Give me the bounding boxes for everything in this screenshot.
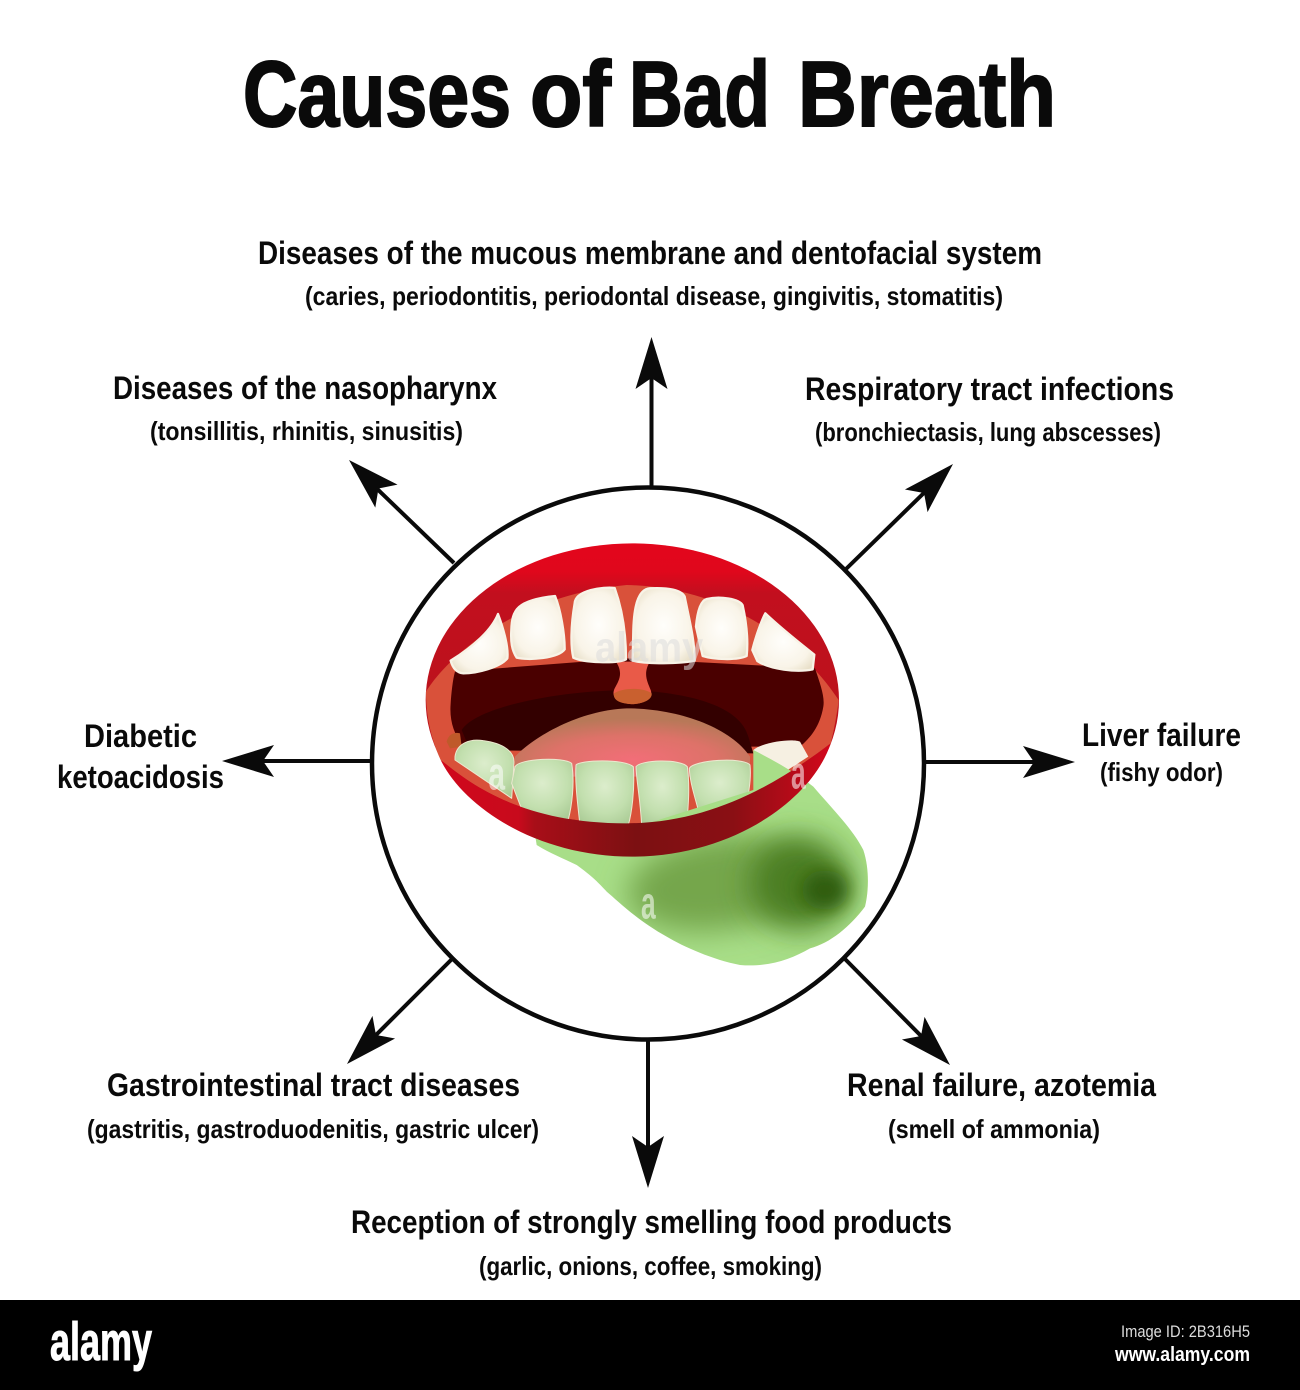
label: gastrointestinal tract diseases: Gastrointestinal tract diseases [107,1067,520,1103]
label: renal failure [847,1067,1156,1144]
label: strongly smelling food [351,1204,952,1281]
label: respiratory tract infections: (bronchiectasis, lung abscesses) [815,417,1161,447]
lips [426,543,839,857]
arrow: down [632,1040,664,1188]
watermark: a [641,877,656,928]
footer url: www.alamy.com [1114,1344,1250,1366]
mouth cavity [450,658,824,747]
lower lip [441,743,831,857]
label: diabetic ketoacidosis: Diabetic [84,718,197,754]
label: renal failure: (smell of ammonia) [888,1114,1100,1144]
lower right tooth [753,740,808,790]
label: nasopharynx diseases [113,370,497,446]
label: respiratory tract infections [805,371,1174,447]
watermark: a [488,747,506,799]
footer logo: alamy [50,1312,152,1372]
arrow: upper left [338,448,454,563]
arrow: lower left [336,958,453,1075]
arrow: up [636,337,668,486]
label: mucous membrane diseases: Diseases of the mucous membrane and dentofacial system [258,235,1042,271]
upper teeth [451,588,814,673]
arrow: lower right [844,958,961,1076]
label: strongly smelling food: Reception of strongly smelling food products [351,1204,952,1240]
footer bar [0,1300,1300,1390]
label: nasopharynx diseases: Diseases of the nasopharynx [113,370,497,406]
lower teeth, green tinted [455,740,750,825]
arrow: right [924,746,1075,778]
label: strongly smelling food: (garlic, onions, coffee, smoking) [479,1251,822,1281]
title [243,42,1056,146]
label: liver failure: (fishy odor) [1100,757,1223,787]
label: liver failure: Liver failure [1082,717,1241,753]
label: diabetic ketoacidosis [57,718,224,795]
gums and inner cheeks [426,585,839,823]
title: Bad [629,42,770,146]
uvula [613,662,652,704]
deep cavity shadow [462,690,753,753]
title: of [530,42,612,146]
label: mucous membrane diseases: (caries, periodontitis, periodontal disease, gingivitis, stomatitis) [305,281,1003,311]
watermark [488,624,806,928]
central circle [372,488,924,1040]
watermark: a [791,746,806,798]
arrow: upper right [846,453,964,569]
label: liver failure [1082,717,1241,787]
label: mucous membrane diseases [258,235,1042,311]
illustration: open mouth with green breath [426,543,880,977]
label: respiratory tract infections: Respiratory tract infections [805,371,1174,407]
arrow: left [222,745,372,777]
green breath cloud [536,750,868,966]
label: gastrointestinal tract diseases: (gastritis, gastroduodenitis, gastric ulcer) [87,1114,539,1144]
left cheek fold [447,733,462,748]
title: Breath [798,42,1056,146]
label: renal failure: Renal failure, azotemia [847,1067,1156,1103]
tongue [515,708,750,777]
label: nasopharynx diseases: (tonsillitis, rhinitis, sinusitis) [150,416,463,446]
label: diabetic ketoacidosis: ketoacidosis [57,759,224,795]
watermark: alamy [595,624,703,671]
label: gastrointestinal tract diseases [87,1067,539,1144]
title: Causes [243,42,511,146]
footer image id: Image ID: 2B316H5 [1121,1322,1250,1341]
